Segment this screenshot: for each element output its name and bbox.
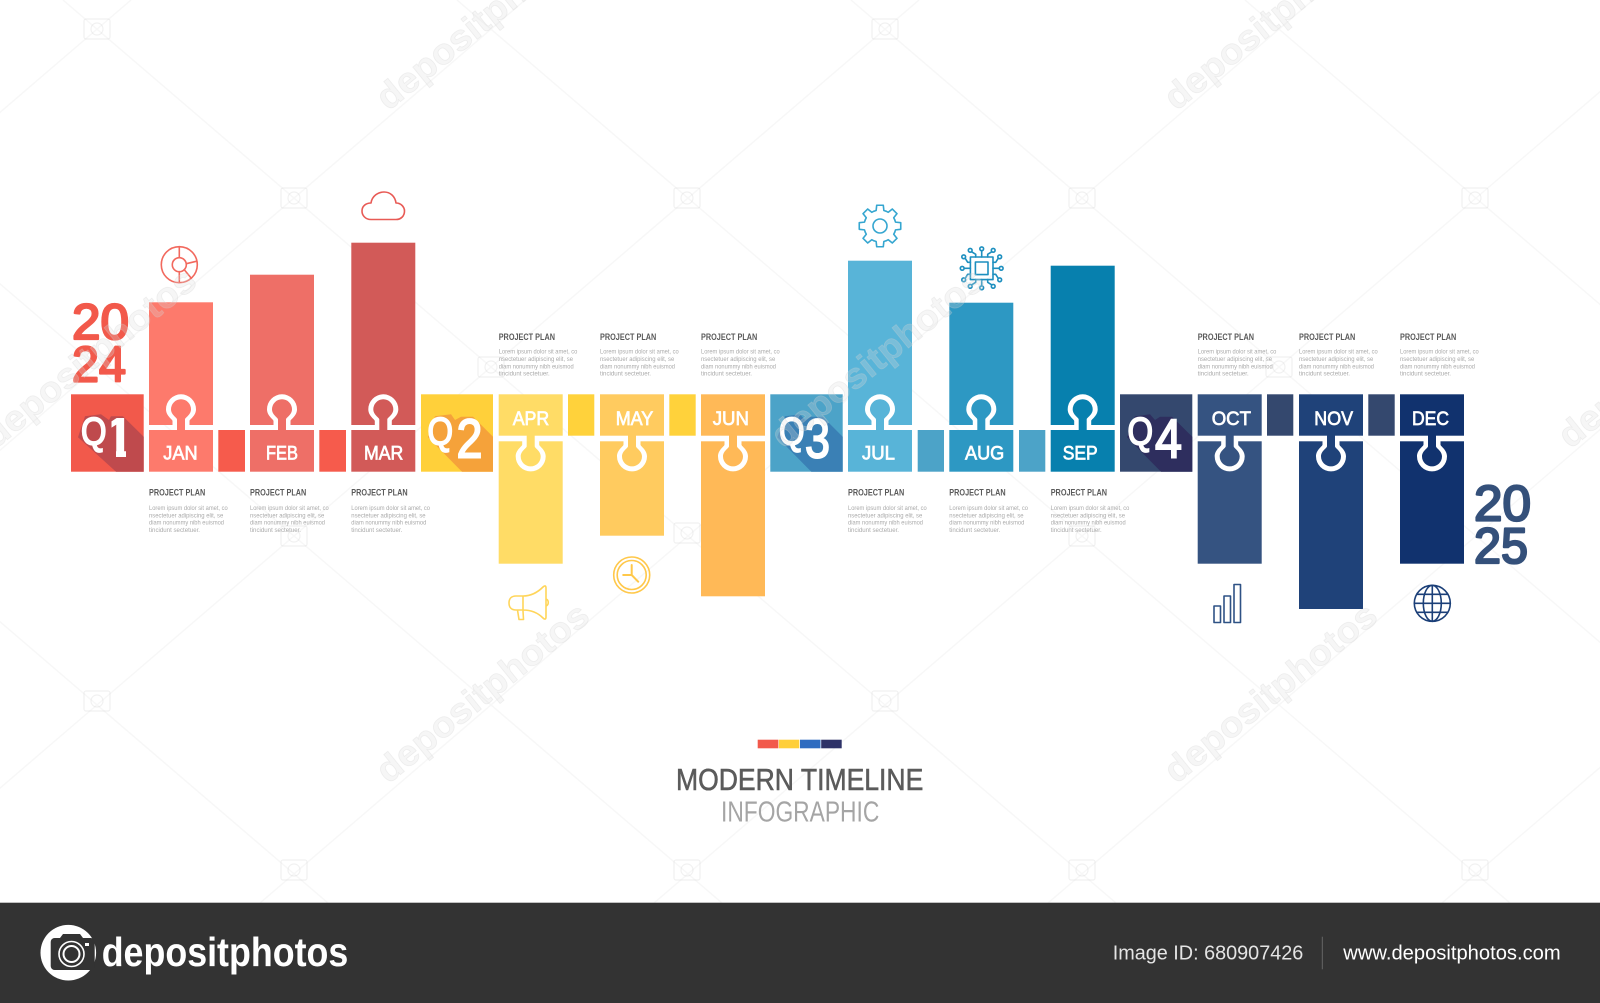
icon: chip [960, 247, 1003, 290]
text block: March plan [351, 488, 430, 534]
panel: Q2: Q [428, 410, 453, 454]
panel: Q1: 1 [103, 406, 135, 470]
connector: Apr to May [568, 394, 594, 436]
connector: Aug to Sep [1019, 430, 1045, 472]
month: July: JUL [862, 443, 895, 464]
text block: April plan: tincidunt sectetuer. [499, 371, 550, 378]
text block: August plan: diam nonummy nibh euismod [949, 520, 1025, 527]
icon: megaphone [509, 586, 548, 620]
text block: May plan [600, 332, 679, 378]
panel: Q1 [71, 394, 144, 472]
text block: January plan: tincidunt sectetuer. [149, 527, 200, 534]
text block: February plan: PROJECT PLAN [250, 488, 306, 499]
text block: April plan: Lorem ipsum dolor sit amet, co [499, 348, 578, 356]
month: September [1051, 266, 1130, 534]
icon: gear [859, 205, 901, 247]
title [676, 762, 923, 829]
text block: December plan: tincidunt sectetuer. [1400, 371, 1451, 378]
text block: June plan: diam nonummy nibh euismod [701, 363, 776, 370]
month: April: APR [513, 409, 549, 430]
logo: wordmark: depositphotos [102, 929, 348, 975]
text block: September plan [1051, 488, 1130, 534]
year 2024 [72, 294, 129, 393]
panel: Q4 [1120, 394, 1192, 472]
website url: www.depositphotos.com [1342, 942, 1561, 964]
connector: May to Jun [669, 394, 696, 436]
text block: October plan: tincidunt sectetuer. [1198, 371, 1249, 378]
month: March: MAR [364, 443, 403, 464]
text block: April plan [499, 332, 578, 378]
text block: February plan [250, 488, 329, 534]
text block: November plan [1299, 332, 1378, 378]
month: June [701, 332, 780, 596]
month: May: MAY [616, 409, 654, 430]
text block: May plan: diam nonummy nibh euismod [600, 363, 675, 370]
icon: bar chart [1214, 584, 1240, 622]
text block: October plan: diam nonummy nibh euismod [1198, 363, 1273, 370]
text block: August plan: Lorem ipsum dolor sit amet, co [949, 505, 1028, 512]
month: April [499, 332, 578, 564]
connector: Oct to Nov [1267, 394, 1293, 436]
text block: July plan: tincidunt sectetuer. [848, 527, 899, 534]
connector: Jan to Feb [218, 430, 245, 472]
title: INFOGRAPHIC [721, 797, 879, 829]
text block: January plan: nsectetuer adipiscing elit, se [149, 512, 224, 519]
icon: globe [1414, 585, 1450, 621]
month: September: SEP [1063, 443, 1098, 464]
panel: Q2: 2 [456, 408, 482, 470]
text block: March plan: nsectetuer adipiscing elit, se [351, 512, 426, 519]
month: January: JAN [163, 443, 198, 464]
watermark overlay: depositphotos [367, 594, 597, 791]
text block: September plan: Lorem ipsum dolor sit amet, co [1051, 505, 1130, 512]
text block: July plan: PROJECT PLAN [848, 488, 904, 499]
month: November [1299, 332, 1378, 609]
icon: clock [614, 557, 650, 593]
image id: Image ID: 680907426 [1113, 942, 1303, 964]
panel: Q3: Q [779, 410, 804, 454]
panel: Q2 [421, 394, 493, 472]
text block: June plan: PROJECT PLAN [701, 332, 757, 343]
panel: Q3: 3 [805, 408, 830, 470]
text block: May plan: tincidunt sectetuer. [600, 371, 651, 378]
month: January [149, 302, 228, 534]
watermark overlay: depositphotos [762, 259, 992, 456]
text block: May plan: PROJECT PLAN [600, 332, 656, 343]
text block: August plan [949, 488, 1028, 534]
text block: February plan: nsectetuer adipiscing elit, se [250, 512, 325, 519]
text block: October plan [1198, 332, 1277, 378]
month: August: AUG [965, 443, 1004, 464]
month: August [949, 303, 1028, 534]
text block: December plan [1400, 332, 1479, 378]
text block: June plan: tincidunt sectetuer. [701, 371, 752, 378]
text block: September plan: PROJECT PLAN [1051, 488, 1107, 499]
text block: June plan: nsectetuer adipiscing elit, se [701, 356, 776, 363]
title: MODERN TIMELINE [676, 762, 923, 797]
text block: February plan: Lorem ipsum dolor sit amet, co [250, 505, 329, 512]
text block: March plan: PROJECT PLAN [351, 488, 408, 499]
connector: Feb to Mar [319, 430, 346, 472]
text block: February plan: diam nonummy nibh euismod [250, 520, 325, 527]
month: May [600, 332, 679, 536]
text block: July plan [848, 488, 927, 534]
connector: Jul to Aug [918, 430, 944, 472]
text block: May plan: Lorem ipsum dolor sit amet, co [600, 348, 679, 356]
text block: January plan: diam nonummy nibh euismod [149, 520, 224, 527]
month: March [351, 243, 430, 534]
text block: May plan: nsectetuer adipiscing elit, se [600, 356, 675, 363]
panel: Q4: 4 [1155, 408, 1182, 470]
text block: March plan: diam nonummy nibh euismod [351, 520, 427, 527]
panel: Q4: Q [1128, 410, 1153, 454]
icon: pie chart [161, 247, 197, 283]
text block: December plan: diam nonummy nibh euismod [1400, 363, 1475, 370]
text block: September plan: diam nonummy nibh euismod [1051, 520, 1126, 527]
text block: November plan: Lorem ipsum dolor sit amet, co [1299, 348, 1378, 356]
text block: September plan: tincidunt sectetuer. [1051, 527, 1102, 534]
text block: January plan: PROJECT PLAN [149, 488, 205, 499]
text block: February plan: tincidunt sectetuer. [250, 527, 301, 534]
month: December [1400, 332, 1479, 564]
legend colour strip [758, 740, 842, 748]
text block: July plan: Lorem ipsum dolor sit amet, co [848, 505, 927, 512]
panel: Q3 [770, 394, 843, 472]
month: February [250, 275, 329, 534]
year 2025: 20 [1474, 476, 1531, 532]
month: October [1198, 332, 1277, 564]
panel: Q1: Q [81, 410, 106, 454]
text block: June plan [701, 332, 780, 378]
text block: December plan: Lorem ipsum dolor sit amet, co [1400, 348, 1479, 356]
watermark overlay: depositphotos [1155, 594, 1385, 791]
icon: cloud [362, 192, 404, 220]
logo: camera badge [41, 925, 96, 980]
month: October: OCT [1212, 409, 1251, 430]
text block: December plan: PROJECT PLAN [1400, 332, 1456, 343]
text block: November plan: PROJECT PLAN [1299, 332, 1355, 343]
text block: January plan [149, 488, 228, 534]
month: November: NOV [1314, 409, 1353, 430]
footer bar [0, 903, 1600, 1003]
text block: April plan: diam nonummy nibh euismod [499, 363, 574, 370]
month: July [848, 261, 927, 534]
year 2024: 24 [72, 337, 126, 393]
text block: October plan: Lorem ipsum dolor sit amet, co [1198, 348, 1277, 356]
text block: June plan: Lorem ipsum dolor sit amet, co [701, 348, 780, 356]
text block: March plan: tincidunt sectetuer. [351, 527, 402, 534]
year 2025 [1474, 476, 1531, 574]
text block: November plan: tincidunt sectetuer. [1299, 371, 1350, 378]
text block: August plan: PROJECT PLAN [949, 488, 1006, 499]
text block: October plan: PROJECT PLAN [1198, 332, 1254, 343]
month: February: FEB [266, 443, 298, 464]
text block: March plan: Lorem ipsum dolor sit amet, co [351, 505, 430, 512]
text block: July plan: diam nonummy nibh euismod [848, 520, 923, 527]
text block: July plan: nsectetuer adipiscing elit, se [848, 512, 923, 519]
text block: April plan: PROJECT PLAN [499, 332, 555, 343]
connector: Nov to Dec [1368, 394, 1395, 436]
year 2024: 20 [72, 294, 129, 350]
text block: November plan: diam nonummy nibh euismod [1299, 363, 1374, 370]
year 2025: 25 [1474, 518, 1528, 574]
text block: August plan: nsectetuer adipiscing elit, se [949, 512, 1024, 519]
month: December: DEC [1412, 409, 1449, 430]
text block: August plan: tincidunt sectetuer. [949, 527, 1000, 534]
text block: January plan: Lorem ipsum dolor sit amet, co [149, 505, 228, 512]
text block: December plan: nsectetuer adipiscing elit, se [1400, 356, 1475, 363]
text block: October plan: nsectetuer adipiscing elit, se [1198, 356, 1272, 363]
text block: September plan: nsectetuer adipiscing elit, se [1051, 512, 1125, 519]
text block: April plan: nsectetuer adipiscing elit, se [499, 356, 573, 363]
text block: November plan: nsectetuer adipiscing elit, se [1299, 356, 1374, 363]
month: June: JUN [713, 409, 749, 430]
